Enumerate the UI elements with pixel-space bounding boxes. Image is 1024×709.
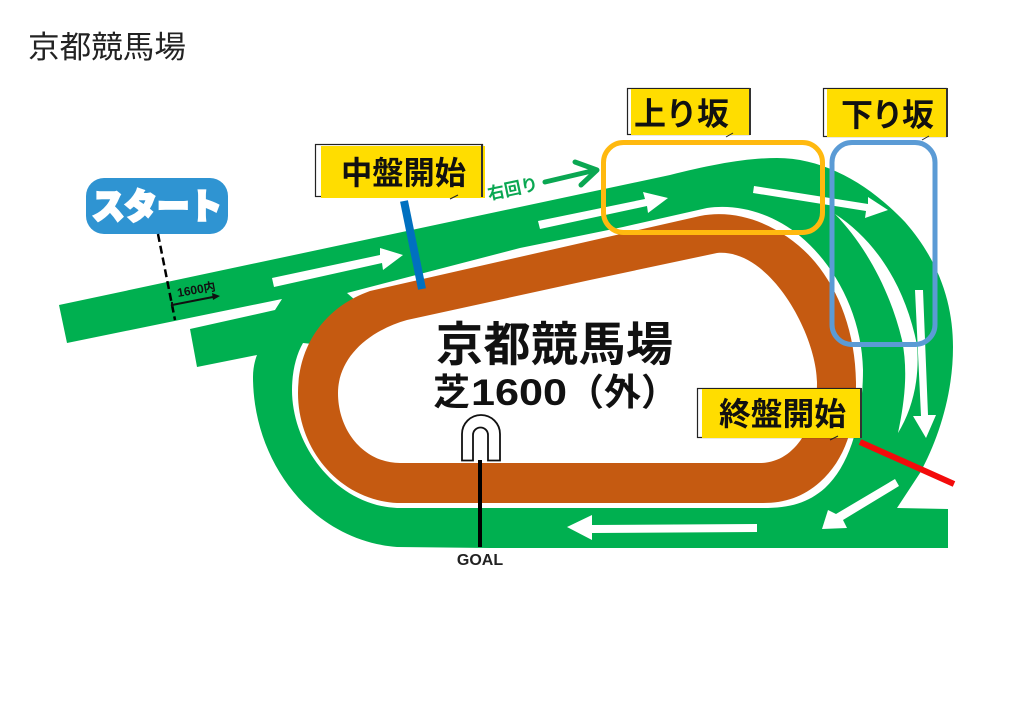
start line [158, 234, 175, 320]
dirt track: brown [298, 214, 856, 503]
arrow: home stretch [567, 515, 757, 540]
start badge: スタート [92, 188, 222, 227]
start badge [86, 178, 228, 234]
arrow: first strip lead-in [753, 186, 888, 218]
highlight: uphill [604, 142, 822, 232]
label: 終盤開始: 終盤開始 [719, 396, 846, 432]
turf track: green [59, 158, 953, 548]
label: 下り坂: 下り坂 [841, 97, 934, 133]
arrow: final corner [822, 479, 899, 529]
course map [59, 158, 953, 548]
course distance: （外） [567, 372, 678, 413]
label: 中盤開始 [316, 144, 485, 199]
direction label [486, 162, 597, 204]
label: 終盤開始 [698, 388, 862, 440]
label: 下り坂 [824, 88, 948, 140]
course name: 京都競馬場 [436, 318, 673, 371]
course distance: 芝 [433, 372, 470, 413]
arrow: downhill [913, 290, 936, 438]
highlight: downhill [832, 142, 935, 344]
label: 上り坂: 上り坂 [634, 96, 729, 132]
label: 上り坂 [628, 88, 751, 137]
title: 京都競馬場 [28, 30, 186, 65]
inner lane divider [835, 214, 918, 433]
icon: gate [462, 415, 500, 460]
distance label [172, 278, 220, 307]
distance label: 1600内 [176, 278, 217, 300]
goal line [478, 460, 482, 547]
arrow: backstretch 2 [538, 192, 668, 229]
label: 中盤開始: 中盤開始 [341, 155, 466, 191]
direction label: 右回り [486, 175, 540, 204]
course distance: 1600 [471, 372, 567, 413]
marker: mid-race start [404, 201, 422, 289]
marker: final stretch start [860, 442, 954, 484]
arrow: backstretch 1 [272, 248, 403, 287]
goal label: GOAL [457, 552, 503, 569]
gap between turf and dirt [292, 207, 863, 508]
